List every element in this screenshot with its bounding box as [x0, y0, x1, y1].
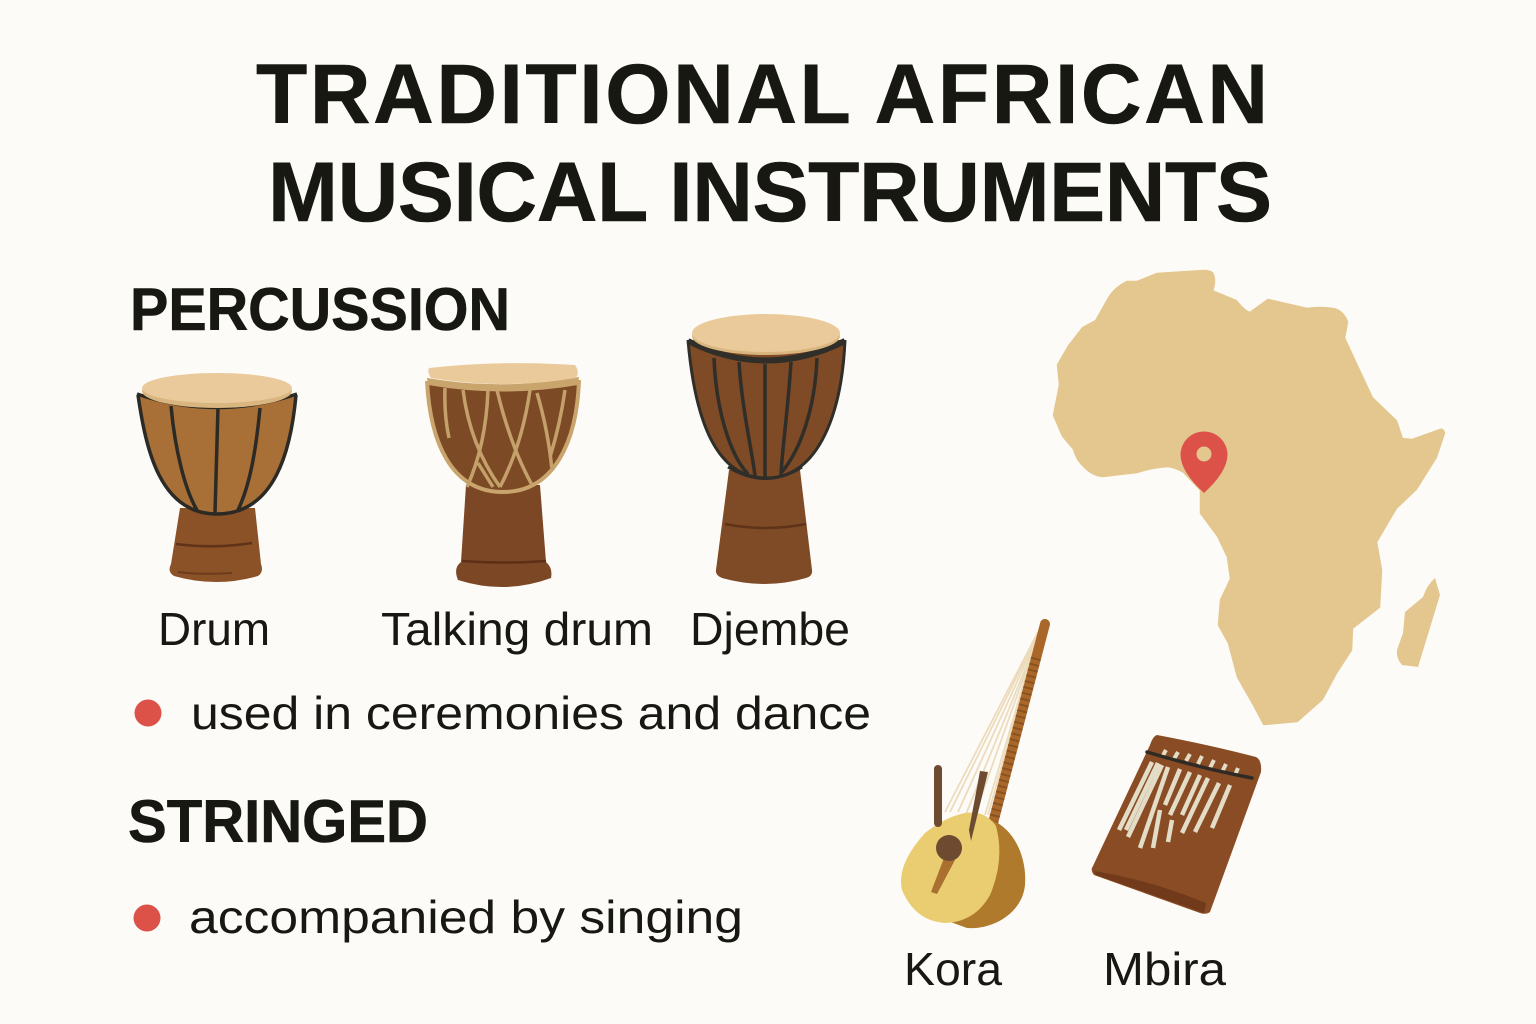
bullet: stringed note: accompanied by singing — [189, 891, 743, 943]
mbira tines — [1119, 762, 1230, 848]
label: kora: Kora — [904, 943, 1002, 995]
bullet: percussion note: used in ceremonies and dance — [191, 687, 871, 739]
kora strings — [945, 632, 1038, 815]
map: Africa — [1054, 271, 1444, 724]
kora sound hole — [931, 835, 962, 894]
label: djembe: Djembe — [690, 603, 850, 655]
kora posts — [938, 769, 988, 841]
kora gourd back — [945, 820, 1025, 928]
kora neck — [993, 624, 1045, 823]
label: talking drum: Talking drum — [381, 603, 653, 655]
icon: mbira — [1092, 735, 1261, 914]
icon: talking drum — [427, 363, 579, 587]
title: TRADITIONAL AFRICAN — [256, 47, 1268, 141]
label: drum: Drum — [158, 603, 270, 655]
title — [256, 47, 1272, 239]
heading: stringed: STRINGED — [128, 788, 428, 855]
heading: percussion: PERCUSSION — [130, 276, 510, 343]
map: Madagascar — [1397, 578, 1440, 667]
icon: kora — [901, 624, 1045, 928]
title: MUSICAL INSTRUMENTS — [268, 145, 1272, 239]
label: mbira: Mbira — [1103, 943, 1226, 995]
kora gourd face — [901, 813, 999, 923]
icon: location pin — [1180, 432, 1228, 493]
icon: djembe — [688, 314, 845, 584]
icon: drum — [137, 373, 297, 582]
mbira bar — [1147, 752, 1252, 778]
